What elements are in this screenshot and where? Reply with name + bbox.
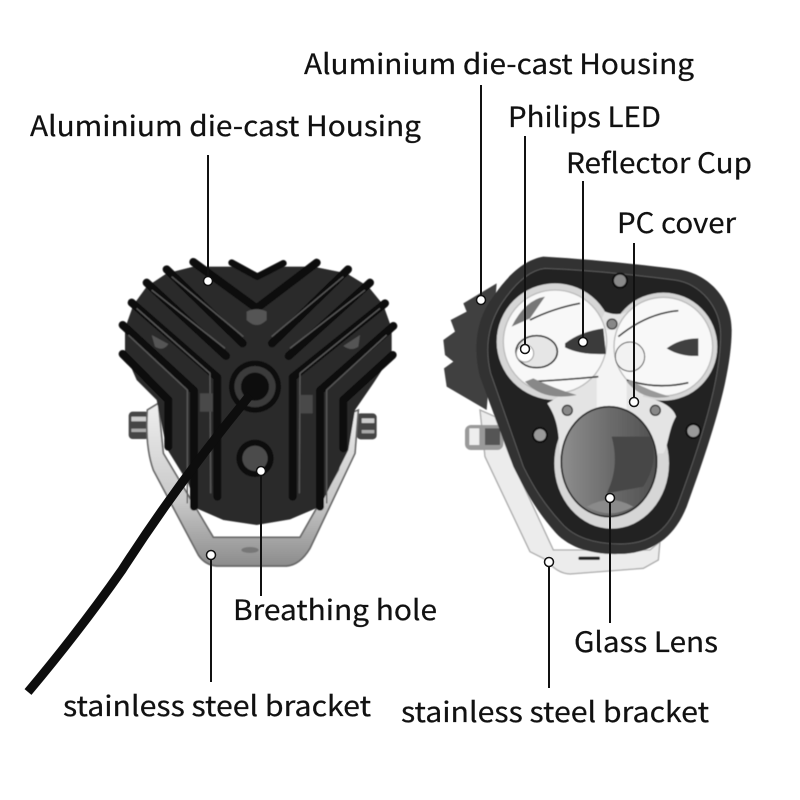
housing rim <box>488 268 721 544</box>
glass lens <box>561 407 657 517</box>
callout: glass lens <box>574 494 718 661</box>
callout: glass lens: Glass Lens <box>574 621 718 661</box>
callout: Philips LED <box>508 96 661 354</box>
callout: left stainless steel bracket <box>63 550 371 725</box>
mounting bolt <box>465 425 503 450</box>
breathing hole valve <box>236 440 274 477</box>
callout: right aluminium housing <box>304 43 694 304</box>
callout: right stainless steel bracket: stainless steel bracket <box>401 691 709 731</box>
callout: left aluminium housing <box>30 105 421 286</box>
bracket slot <box>578 557 600 560</box>
callout: reflector cup: Reflector Cup <box>566 142 752 182</box>
reflector cup right <box>614 297 713 398</box>
callout: left aluminium housing: Aluminium die-cast Housing <box>30 105 421 145</box>
callout: Philips LED: Philips LED <box>508 96 661 136</box>
stainless steel bracket <box>147 403 358 566</box>
cable gland <box>229 361 281 413</box>
power cable <box>28 395 250 692</box>
side bosses <box>152 335 168 349</box>
finned heat sink body <box>125 267 392 525</box>
fin highlights <box>128 277 387 503</box>
bracket hole <box>241 547 259 553</box>
left lamp: rear view <box>123 262 393 566</box>
reflector cup left <box>503 290 607 397</box>
metal face plate <box>497 283 717 529</box>
housing screws <box>533 274 700 442</box>
callout: right aluminium housing: Aluminium die-cast Housing <box>304 43 694 83</box>
callout: reflector cup <box>566 142 752 346</box>
housing shell <box>476 257 732 554</box>
callout: left stainless steel bracket: stainless steel bracket <box>63 685 371 725</box>
callout: right stainless steel bracket <box>401 558 709 731</box>
callout: breathing hole: Breathing hole <box>233 589 437 629</box>
rear fins seen from the side <box>443 283 497 410</box>
callout: breathing hole <box>233 466 437 629</box>
top boss <box>247 309 267 325</box>
callout: PC cover <box>617 202 736 406</box>
left mounting bolt <box>129 412 149 439</box>
stainless steel bracket <box>480 410 660 574</box>
callout: PC cover: PC cover <box>617 202 736 242</box>
heat sink fins <box>123 262 393 507</box>
right mounting bolt <box>357 413 377 439</box>
right lamp: front view <box>443 257 732 574</box>
